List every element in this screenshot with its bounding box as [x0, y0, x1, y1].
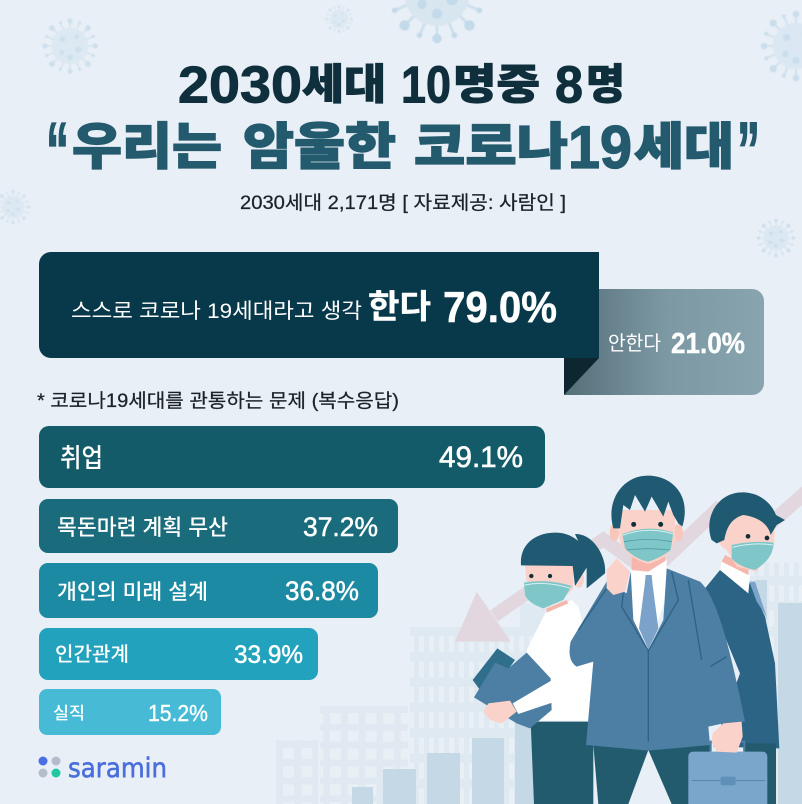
panel: yes 79.0% — [39, 252, 599, 358]
hand on briefcase — [712, 722, 743, 753]
sleeve — [513, 678, 575, 714]
bar: personal future design: 개인의 미래 설계 — [57, 581, 208, 604]
chart heading: * 코로나19세대를 관통하는 문제 (복수응답) — [37, 390, 399, 412]
fold shadow — [564, 358, 599, 395]
title line 1: 명 — [586, 61, 625, 108]
bar: relationships: 인간관계 — [55, 643, 129, 666]
bar: relationships: 33.9% — [234, 641, 303, 669]
label no: 안한다 — [608, 332, 661, 355]
title line 2: 코로나 — [414, 119, 568, 175]
center man — [570, 476, 767, 804]
hair — [709, 492, 785, 543]
illustration: arrow and office workers — [455, 476, 802, 804]
face — [715, 510, 775, 572]
bar: personal future design: 36.8% — [285, 576, 359, 606]
title line 2: 19 — [568, 114, 632, 181]
mask — [622, 529, 673, 562]
face — [525, 565, 573, 608]
ponytail — [575, 534, 605, 588]
trousers — [593, 745, 710, 804]
jacket lines — [578, 572, 727, 742]
bar: employment — [39, 426, 545, 488]
label yes: 스스로 코로나 19세대라고 생각 — [71, 300, 362, 323]
title line 2: 세대 — [634, 119, 734, 175]
title line 1: 세대 — [302, 61, 386, 108]
briefcase handle — [711, 742, 744, 752]
grey box — [564, 289, 764, 395]
neck — [632, 557, 665, 575]
bar: saving money: 목돈마련 계획 무산 — [57, 515, 228, 540]
neck — [722, 555, 748, 575]
briefcase — [688, 752, 767, 804]
background city buildings — [276, 563, 802, 804]
emphasis yes: 한다 — [368, 288, 431, 325]
value no: 21.0% — [671, 328, 745, 360]
bar: saving money — [39, 499, 398, 553]
trousers — [743, 743, 776, 804]
shirt — [631, 560, 667, 650]
title line 1: 2030 — [178, 56, 302, 114]
raised hand — [607, 558, 630, 595]
title line 1: 8 — [555, 56, 583, 114]
hair — [611, 476, 685, 528]
right man — [705, 492, 785, 804]
bar: job loss — [39, 689, 221, 735]
bar: employment: 취업 — [60, 443, 103, 473]
bar: saving money: 37.2% — [303, 512, 378, 542]
title line 2: ” — [737, 106, 760, 197]
panel: no 21.0% — [564, 289, 764, 395]
tie — [749, 582, 767, 617]
title line 1: 10 — [401, 56, 451, 114]
dark box — [39, 252, 599, 358]
bar: personal future design — [39, 563, 378, 618]
title — [46, 56, 760, 197]
eyes — [529, 574, 533, 578]
suit — [705, 570, 779, 748]
tie — [639, 575, 658, 649]
ears — [610, 524, 619, 541]
eyes — [746, 534, 750, 539]
jacket — [570, 568, 745, 751]
neck — [547, 600, 568, 613]
virus decorations — [0, 0, 802, 257]
trousers — [531, 722, 593, 804]
hand — [483, 701, 517, 723]
folders — [473, 648, 552, 728]
title line 2: 암울한 — [243, 119, 396, 175]
blouse — [527, 600, 593, 721]
title line 2: 우리는 — [72, 119, 222, 175]
mask — [732, 542, 773, 570]
title line 1: 명중 — [453, 61, 540, 108]
eyes — [631, 522, 636, 527]
declining arrow — [455, 492, 802, 642]
subtitle / source: 2030세대 2,171명 [ 자료제공: 사람인 ] — [240, 192, 566, 214]
bar: employment: 49.1% — [439, 441, 523, 474]
bar chart — [39, 426, 545, 735]
mask — [524, 581, 572, 608]
bar: relationships — [39, 628, 318, 680]
woman — [473, 533, 605, 804]
face — [619, 510, 675, 564]
bar: job loss: 실직 — [53, 704, 85, 723]
value yes: 79.0% — [443, 283, 557, 332]
logo: saramin: saramin — [68, 753, 167, 784]
title line 2: “ — [46, 106, 69, 197]
shirt — [720, 560, 750, 593]
hair — [521, 533, 588, 586]
bar: job loss: 15.2% — [148, 700, 208, 726]
